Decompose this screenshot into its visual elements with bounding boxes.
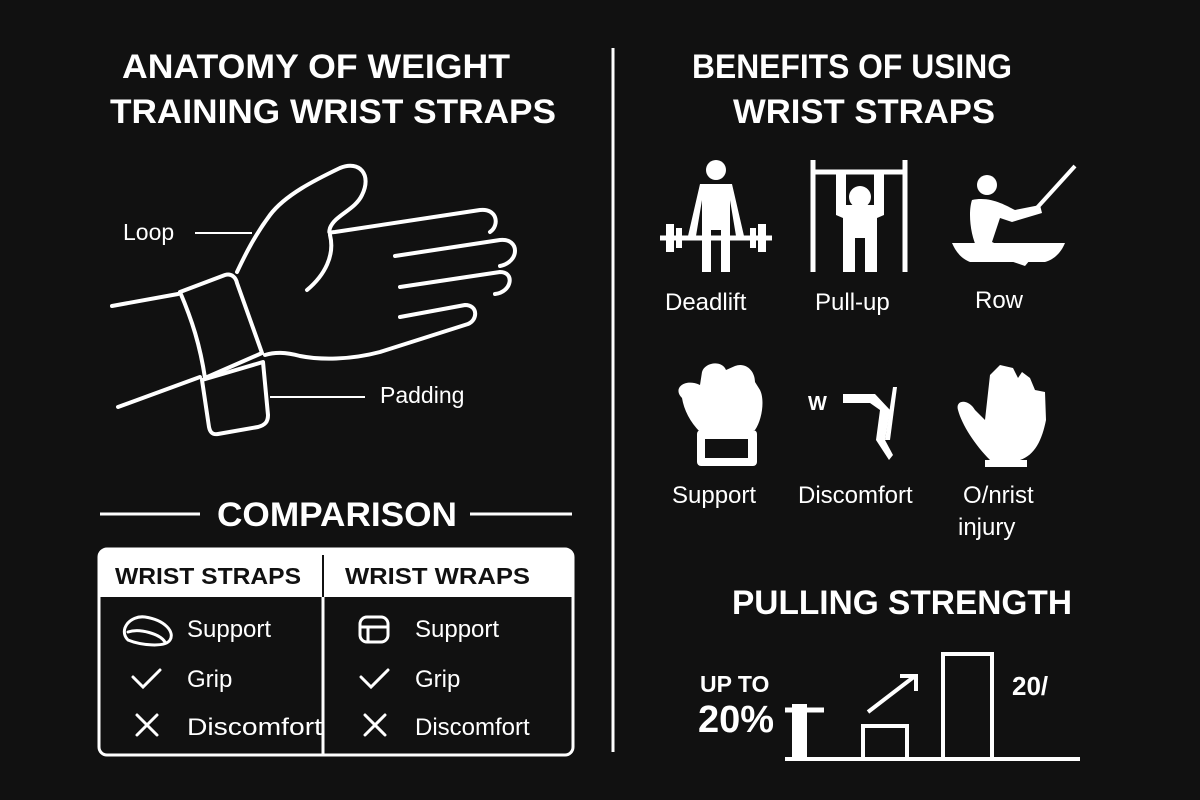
comparison table: Discomfort bbox=[187, 714, 322, 741]
labels row 1: Pull-up bbox=[815, 289, 890, 316]
comparison table: Discomfort bbox=[415, 714, 530, 741]
icon: discomfort bbox=[808, 387, 897, 460]
bar chart: 20/ bbox=[1012, 671, 1048, 701]
label: padding: Padding bbox=[380, 382, 464, 408]
icon: deadlift bbox=[660, 160, 772, 272]
comparison table bbox=[99, 549, 573, 755]
title: benefits bbox=[692, 48, 1012, 131]
heading: pulling strength: PULLING STRENGTH bbox=[732, 584, 1072, 622]
label: loop bbox=[123, 219, 252, 245]
labels row 2: O/nrist bbox=[963, 482, 1034, 509]
bar chart bbox=[785, 654, 1080, 759]
title: anatomy: TRAINING WRIST STRAPS bbox=[110, 93, 556, 131]
icon: support glove bbox=[678, 363, 762, 466]
comparison table: WRIST WRAPS bbox=[345, 563, 530, 589]
title: anatomy: ANATOMY OF WEIGHT bbox=[122, 48, 510, 86]
labels row 2 bbox=[672, 482, 1034, 541]
title: anatomy bbox=[110, 48, 556, 131]
heading: comparison: COMPARISON bbox=[217, 496, 457, 534]
labels row 1: Deadlift bbox=[665, 289, 747, 316]
icon: row bbox=[952, 166, 1075, 266]
labels row 2: Support bbox=[672, 482, 756, 509]
callout: up to 20%: 20% bbox=[698, 699, 774, 741]
icon: injury hand bbox=[958, 365, 1046, 467]
labels row 2: injury bbox=[958, 514, 1015, 541]
callout: up to 20%: UP TO bbox=[700, 671, 769, 697]
hand diagram with strap bbox=[112, 166, 515, 434]
comparison table: Grip bbox=[415, 666, 460, 693]
title: benefits: WRIST STRAPS bbox=[733, 93, 995, 131]
labels row 1 bbox=[665, 287, 1024, 316]
labels row 1: Row bbox=[975, 287, 1024, 314]
callout: up to 20% bbox=[698, 671, 774, 741]
comparison table: WRIST STRAPS bbox=[115, 563, 301, 589]
comparison table: Support bbox=[415, 616, 499, 643]
icon: discomfort: W bbox=[808, 393, 827, 415]
icon: pull-up bbox=[813, 160, 905, 272]
labels row 2: Discomfort bbox=[798, 482, 913, 509]
comparison table: Support bbox=[187, 616, 271, 643]
title: benefits: BENEFITS OF USING bbox=[692, 48, 1012, 86]
label: loop: Loop bbox=[123, 219, 174, 245]
comparison table: Grip bbox=[187, 666, 232, 693]
